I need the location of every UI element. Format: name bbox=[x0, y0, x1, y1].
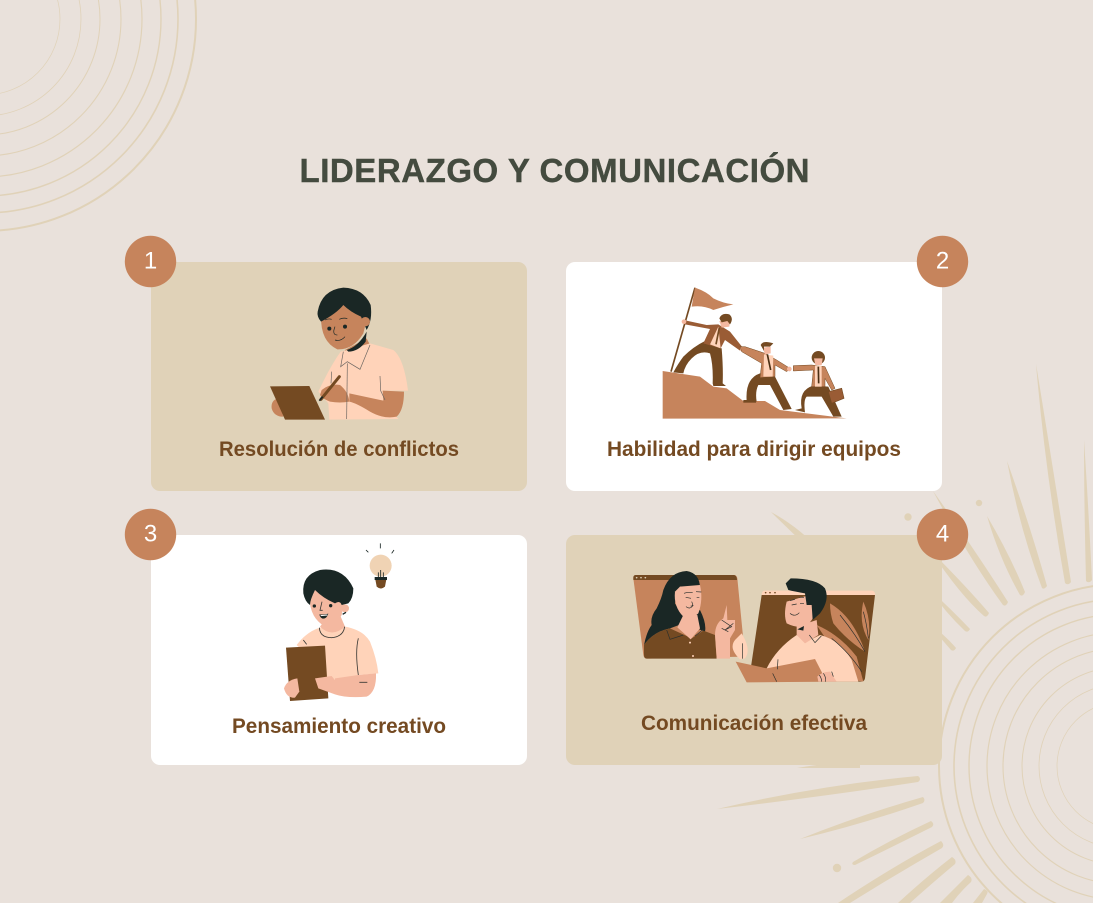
label: Comunicación efectiva bbox=[641, 712, 867, 735]
icon: two people video chat bbox=[633, 571, 875, 682]
badge 4 bbox=[917, 509, 968, 560]
panel: habilidad para dirigir equipos bbox=[566, 262, 942, 491]
badge 4: 4 bbox=[936, 520, 949, 548]
panel: pensamiento creativo bbox=[151, 535, 527, 765]
panel: comunicación efectiva bbox=[566, 535, 942, 765]
badge 1: 1 bbox=[144, 248, 157, 274]
badge 2 bbox=[917, 236, 968, 287]
label: Pensamiento creativo bbox=[232, 715, 446, 738]
decoration: sunburst bottom right bbox=[717, 364, 1093, 903]
icon: man writing on clipboard bbox=[270, 288, 408, 420]
label: Habilidad para dirigir equipos bbox=[607, 438, 901, 461]
decoration: concentric rings top left bbox=[0, 0, 196, 231]
title: LIDERAZGO Y COMUNICACIÓN bbox=[300, 152, 810, 189]
label: Resolución de conflictos bbox=[219, 438, 459, 461]
badge 1 bbox=[125, 236, 176, 287]
badge 2: 2 bbox=[936, 248, 949, 274]
icon: team climbing with flag bbox=[663, 288, 847, 419]
icon: person with notebook and light bulb bbox=[284, 543, 394, 701]
badge 3: 3 bbox=[144, 520, 157, 548]
badge 3 bbox=[125, 509, 176, 560]
panel: resolución de conflictos bbox=[151, 262, 527, 491]
